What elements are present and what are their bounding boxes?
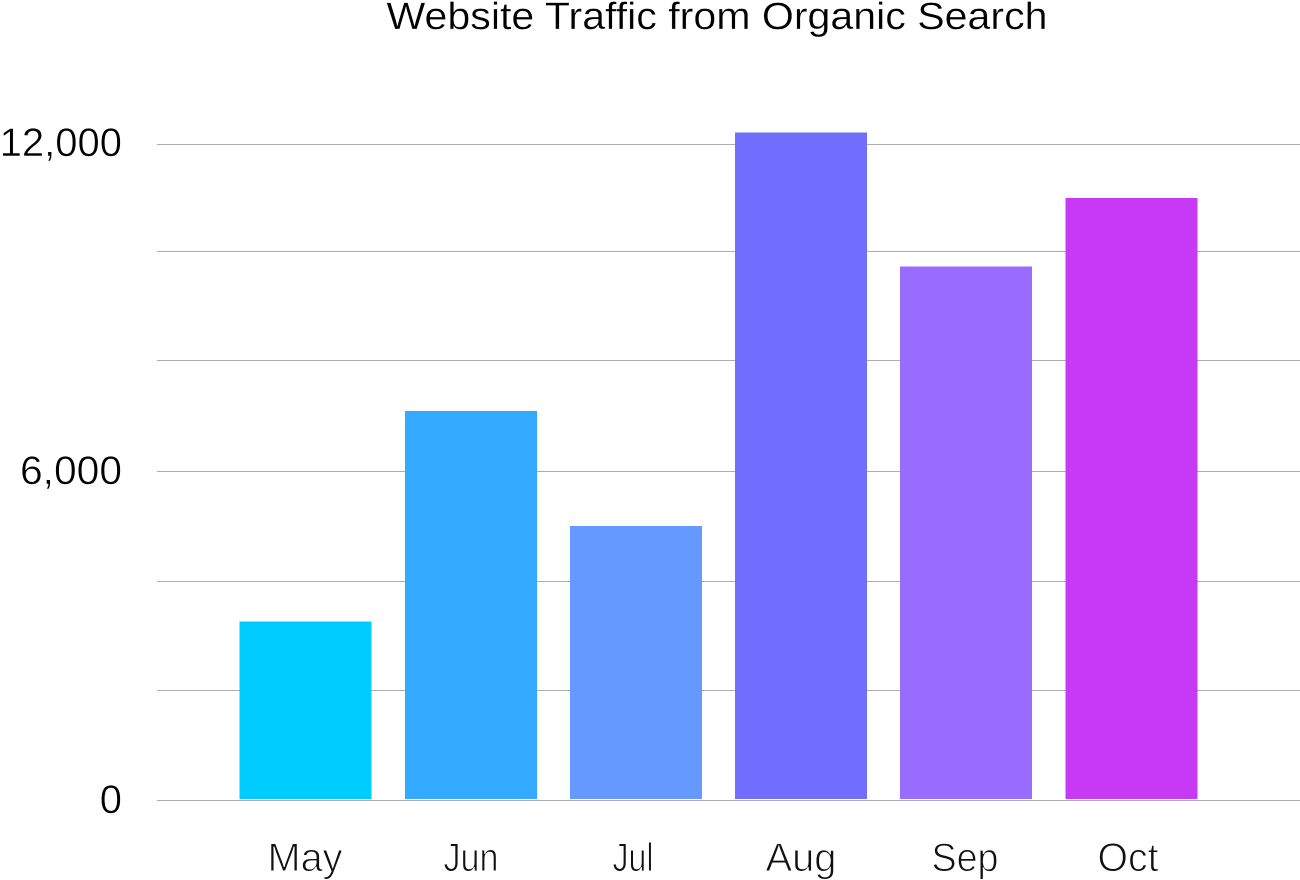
x axis labels: Jun [444,836,498,880]
bar: May [240,622,372,799]
bar: Jul [570,526,702,799]
x axis labels: Jul [612,836,654,880]
y axis labels: 12,000 [0,121,122,165]
x axis labels: Aug [766,836,836,880]
x axis labels: Sep [932,836,998,880]
x axis labels: Oct [1098,836,1158,880]
bar: Jun [405,411,537,799]
x axis labels [268,836,1158,880]
bars [240,132,1198,799]
bar: Sep [900,266,1032,799]
y axis labels: 0 [100,778,122,822]
y axis labels [0,121,122,822]
bar: Oct [1066,198,1198,799]
y axis labels: 6,000 [20,449,122,493]
x axis labels: May [268,836,342,880]
bar: Aug [735,132,867,799]
